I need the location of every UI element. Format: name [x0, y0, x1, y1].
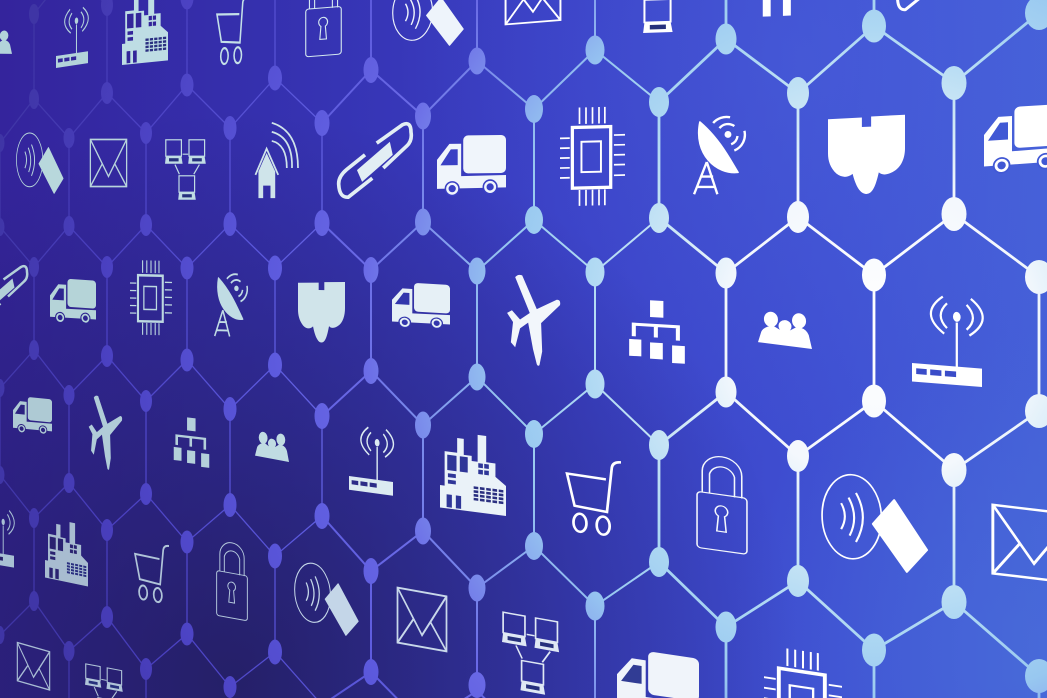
icons: row 5 [0, 506, 982, 698]
icon: truck [437, 135, 506, 196]
icon: contactless card [822, 473, 927, 573]
icon: airplane [89, 395, 122, 470]
icon: padlock [697, 453, 747, 554]
icon: chain link [339, 124, 411, 197]
icon: house [758, 0, 829, 17]
icon: truck [617, 647, 699, 698]
icon: airplane [507, 274, 560, 367]
icon: networked computers [85, 664, 123, 698]
icon: factory [45, 517, 88, 586]
icon: truck [392, 282, 450, 331]
icon: truck [13, 395, 52, 436]
icon: wireless router [349, 425, 393, 496]
icon: group of people [255, 431, 289, 462]
icon: chip [764, 645, 842, 698]
icon: envelope [506, 0, 560, 24]
icon: shield [828, 115, 905, 195]
icon: factory [440, 430, 506, 516]
icon: envelope [17, 642, 50, 690]
icon: router [56, 7, 88, 68]
icon: wireless router [912, 294, 983, 387]
icon: chip [560, 106, 625, 206]
icon: shopping cart [567, 457, 621, 536]
icon: networked computers [165, 140, 206, 200]
icon: satellite dish [694, 117, 745, 194]
icon: organisation chart [174, 416, 209, 468]
icon: cart [217, 0, 248, 65]
icon: chip [130, 260, 172, 336]
icon: wireless router [0, 506, 14, 568]
icon: networked computers [621, 0, 689, 34]
icons: row 1 [0, 0, 957, 68]
icon: people [0, 30, 12, 56]
icons: row 4 [13, 395, 1047, 583]
icon: chain link [0, 266, 27, 317]
icon: organisation chart [629, 299, 685, 364]
icon: satellite dish [215, 274, 247, 337]
icon: envelope [90, 139, 127, 187]
icons: row 6 [17, 642, 123, 698]
icon: padlock [217, 540, 247, 621]
icon: factory [122, 0, 168, 65]
icons: row 2 [16, 104, 1047, 206]
icon: truck [984, 104, 1047, 175]
icon: house [255, 123, 298, 198]
icon: satellite dish [906, 695, 982, 698]
icon: contactless card [16, 133, 63, 193]
icons: row 3 [0, 260, 983, 387]
icon: group of people [758, 311, 812, 349]
icon: shield [298, 281, 345, 343]
icon: envelope [398, 588, 446, 651]
icon: contactless card [295, 560, 358, 637]
icon: lock [306, 0, 341, 57]
icon: truck [50, 278, 96, 326]
icon: contactless card [393, 0, 463, 48]
icon: networked computers [502, 612, 559, 697]
icon: chain link [898, 0, 957, 10]
icon: envelope [993, 505, 1047, 583]
icon: shopping cart [135, 541, 169, 604]
